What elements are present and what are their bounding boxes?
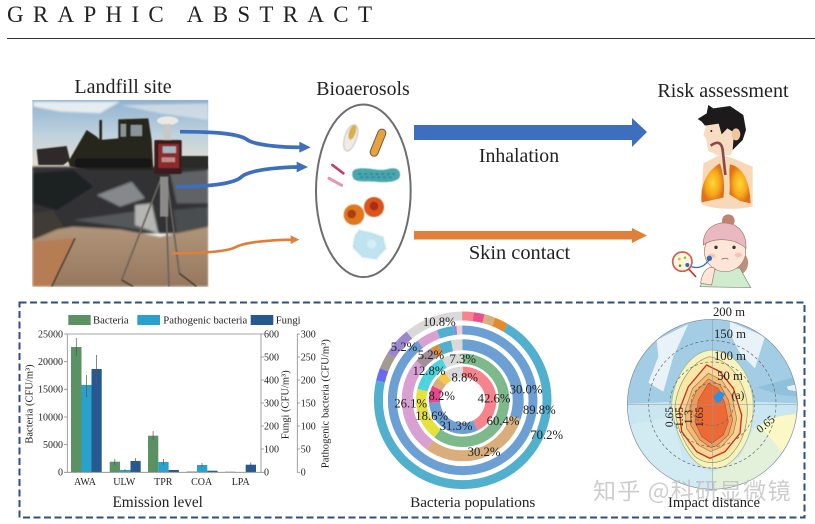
ring 2 <box>392 330 533 471</box>
heading: Risk assessment: Risk assessment <box>657 80 789 102</box>
title: GRAPHIC ABSTRACT <box>7 2 372 27</box>
ring 1 <box>378 316 547 485</box>
ring 5 <box>434 372 491 428</box>
polar distance labels <box>713 305 746 402</box>
contours <box>672 350 753 469</box>
left axis tick labels: 5000 <box>43 440 63 451</box>
axes <box>67 334 297 472</box>
polar distance labels: 150 m <box>714 327 746 341</box>
sampler device <box>157 116 178 125</box>
donut percentage labels <box>391 315 564 459</box>
legend <box>68 314 301 326</box>
icon: orange rod <box>369 128 387 157</box>
fungi axis tick labels: 400 <box>264 376 279 386</box>
pathogenic axis tick labels: 50 <box>301 444 311 456</box>
left axis tick labels <box>38 330 63 479</box>
icon: girl with skin irritation <box>673 214 751 288</box>
donut percentage labels: 70.2% <box>530 428 564 442</box>
donut percentage labels: 42.6% <box>478 392 511 406</box>
panel: dashed results box <box>20 302 804 518</box>
polar contour value labels: 1.05 <box>674 407 686 427</box>
category labels <box>74 477 250 488</box>
legend: Bacteria <box>93 314 129 326</box>
polar contour map: impact distance <box>620 317 803 493</box>
pathogenic axis tick labels: 100 <box>301 422 316 432</box>
category labels: LPA <box>232 477 250 488</box>
donut percentage labels: 89.8% <box>523 403 556 417</box>
icon: pale blue microbe <box>353 231 385 259</box>
arrows from landfill to bioaerosols <box>172 132 311 253</box>
donut percentage labels: 10.8% <box>423 315 456 329</box>
donut percentage labels: 8.8% <box>451 370 478 384</box>
pathogenic axis tick labels <box>301 330 316 479</box>
category labels: TPR <box>154 477 173 488</box>
donut percentage labels: 7.3% <box>449 352 476 366</box>
polar distance labels: 50 m <box>717 369 743 383</box>
ring 4 <box>421 359 504 442</box>
donut percentage labels: 18.6% <box>415 409 449 423</box>
bars <box>71 347 256 472</box>
pathogenic axis tick labels: 300 <box>301 330 316 340</box>
source marker <box>713 391 725 403</box>
left axis tick labels: 20000 <box>38 357 63 368</box>
arrow: inhalation <box>414 118 647 147</box>
pathogenic axis tick labels: 200 <box>301 376 316 386</box>
polar contour value labels: 0.65 <box>755 413 778 436</box>
legend: Pathogenic bacteria <box>163 314 248 326</box>
polar contour value labels: 0.65 <box>664 407 676 427</box>
label: Inhalation: Inhalation <box>479 145 559 167</box>
arrow: orange <box>172 235 299 253</box>
photo: landfill site with sampler <box>32 100 208 287</box>
ring 3 <box>407 345 518 456</box>
donut percentage labels: 31.3% <box>440 419 473 433</box>
left axis tick labels: 25000 <box>38 330 63 340</box>
pathogenic axis tick labels: 0 <box>301 468 306 479</box>
polar distance labels: 100 m <box>714 349 746 363</box>
donut percentage labels: 8.2% <box>428 389 455 403</box>
axis title: fungi: Fungi (CFU/m³) <box>280 370 292 439</box>
fungi axis tick labels <box>264 330 279 479</box>
error bars <box>76 338 251 471</box>
donut percentage labels: 12.8% <box>413 364 446 378</box>
donut percentage labels: 60.4% <box>487 414 520 428</box>
left axis tick labels: 15000 <box>38 385 63 396</box>
icon: pink rods <box>329 165 343 185</box>
fungi axis tick labels: 100 <box>264 444 279 456</box>
donut percentage labels: 26.1% <box>394 396 428 410</box>
category labels: ULW <box>113 477 136 488</box>
donut percentage labels: 5.2% <box>418 348 445 362</box>
fungi axis tick labels: 600 <box>264 330 279 340</box>
donut percentage labels: 5.2% <box>391 340 418 354</box>
axis title: bacteria: Bacteria (CFU/m³) <box>24 364 36 444</box>
range rings and axes <box>627 319 797 489</box>
axis title: pathogenic bacteria: Pathogenic bacteria (CFU/m³) <box>320 339 332 468</box>
donut chart: bacteria populations <box>378 316 547 485</box>
polar contour value labels: 1.3 <box>683 410 695 424</box>
fungi axis tick labels: 300 <box>264 398 279 410</box>
watermark: 知乎 @科研显微镜 <box>593 472 792 506</box>
icon: orange spores <box>344 197 384 225</box>
donut percentage labels: 30.0% <box>510 382 543 396</box>
label: Emission level: Emission level <box>112 494 203 511</box>
bar chart: emission level <box>24 314 332 488</box>
label: Bacteria populations: Bacteria populations <box>410 494 535 511</box>
category labels: COA <box>191 477 213 488</box>
polar contour value labels: 1.65 <box>694 407 706 427</box>
arrow: skin contact <box>414 228 647 243</box>
donut percentage labels: 30.2% <box>468 445 501 459</box>
arrow: upper blue <box>180 132 311 153</box>
fungi axis tick labels: 200 <box>264 422 279 432</box>
icon: boy with lungs <box>698 105 753 209</box>
bioaerosols ellipse with microbes <box>316 104 411 277</box>
pathogenic axis tick labels: 150 <box>301 398 316 410</box>
icon: bacillus pale <box>344 124 358 151</box>
left axis tick labels: 10000 <box>38 412 63 423</box>
polar contour value labels <box>664 407 778 436</box>
category labels: AWA <box>74 477 97 488</box>
fungi axis tick labels: 500 <box>264 352 279 364</box>
label: Skin contact: Skin contact <box>469 242 571 264</box>
pathogenic axis tick labels: 250 <box>301 352 316 364</box>
label: Impact distance: Impact distance <box>668 495 760 511</box>
polar distance labels: (a) <box>732 390 745 402</box>
fungi axis tick labels: 0 <box>264 468 269 479</box>
left axis tick labels: 0 <box>58 468 63 479</box>
heading: Bioaerosols: Bioaerosols <box>316 78 410 100</box>
heading: Landfill site: Landfill site <box>74 76 172 98</box>
icon: teal bacterium <box>352 168 400 182</box>
polar distance labels: 200 m <box>713 305 745 319</box>
arrow: lower blue <box>176 162 308 187</box>
legend: Fungi <box>276 314 301 326</box>
